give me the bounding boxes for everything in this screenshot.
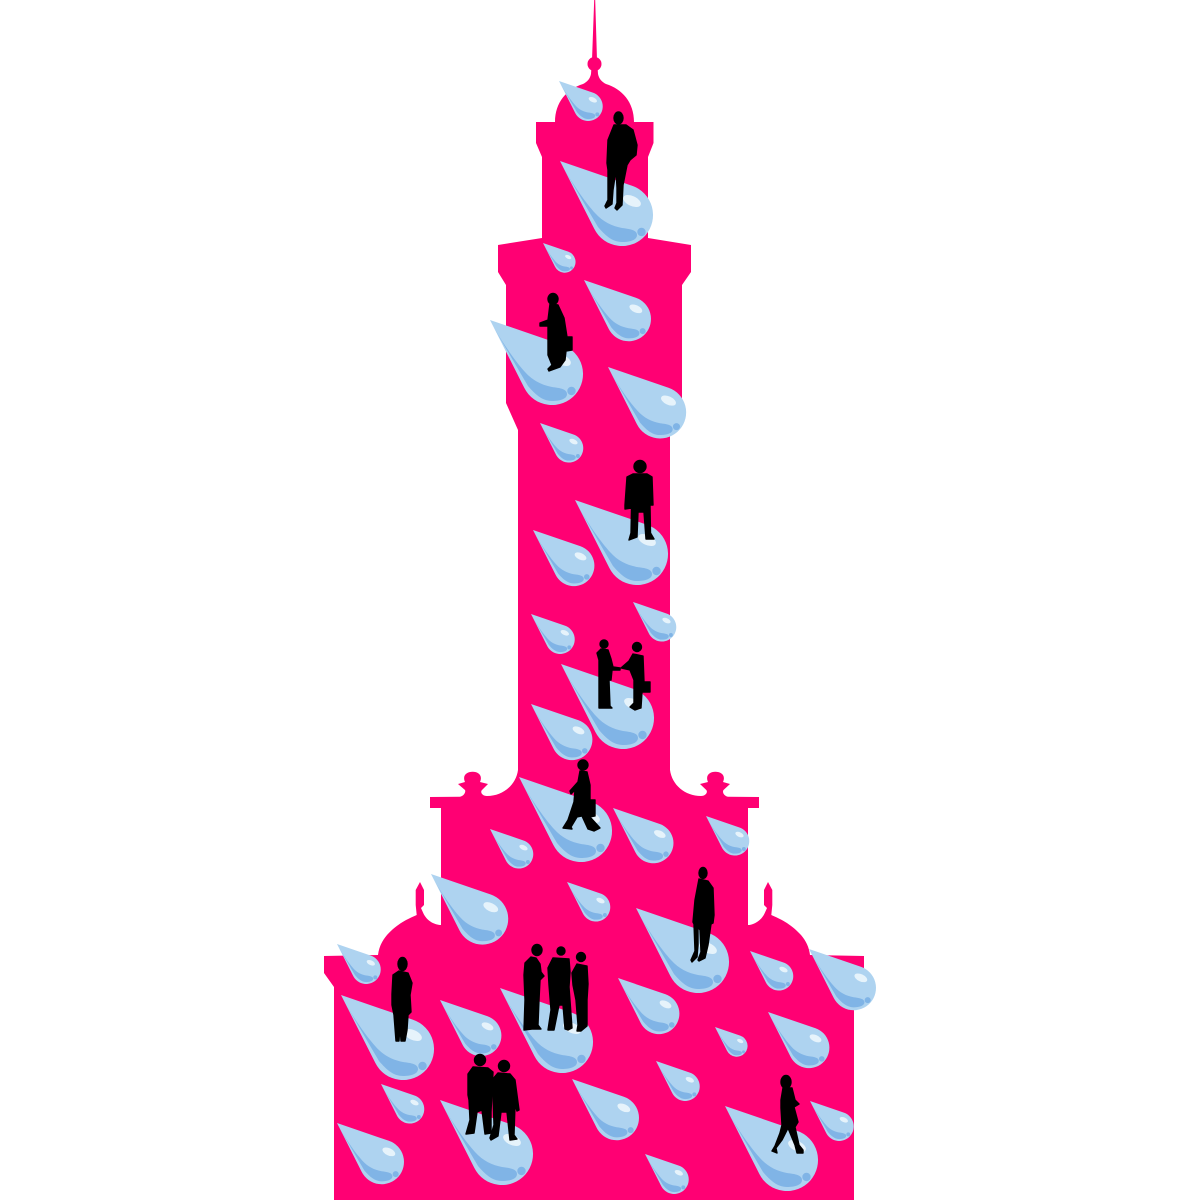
drop 23 [809, 949, 876, 1010]
drop 24 [341, 995, 434, 1080]
drop 29 [768, 1012, 829, 1068]
drop 1 [559, 81, 603, 121]
drop 10 [633, 602, 676, 642]
drop 3 [543, 243, 576, 273]
drop 5 [490, 320, 583, 405]
people silhouettes [392, 112, 803, 1153]
drop 16 [706, 816, 749, 856]
drop 8 [575, 500, 668, 585]
drop 25 [440, 1000, 501, 1056]
drop 20 [636, 908, 729, 993]
water drops [337, 81, 876, 1194]
drop 37 [645, 1154, 689, 1194]
drop 6 [608, 367, 686, 438]
walking woman [772, 1076, 803, 1153]
drop 11 [531, 614, 575, 654]
drop 7 [540, 423, 583, 463]
drop 30 [381, 1084, 424, 1124]
drop 35 [810, 1101, 854, 1141]
left man [466, 1054, 493, 1134]
drop 14 [519, 777, 612, 862]
drop 21 [337, 944, 381, 984]
man standing at top [605, 112, 637, 210]
woman at left [392, 958, 412, 1041]
drop 19 [567, 882, 610, 922]
drop 17 [490, 829, 533, 869]
left person [524, 944, 544, 1030]
drop 31 [656, 1061, 700, 1101]
spire ball [588, 57, 602, 71]
drop 36 [337, 1123, 404, 1184]
drop 22 [750, 951, 793, 991]
drop 2 [560, 161, 653, 246]
drop 13 [531, 704, 592, 760]
walking man with briefcase [563, 760, 600, 831]
drop 32 [572, 1079, 639, 1140]
drop 27 [618, 978, 679, 1034]
tower silhouette [324, 0, 864, 1200]
drop 33 [440, 1100, 533, 1185]
drop 9 [533, 530, 594, 586]
group of three people [524, 944, 588, 1031]
tower body [324, 0, 864, 1200]
right person [572, 952, 588, 1031]
man in suit [625, 460, 654, 540]
middle person [548, 947, 572, 1030]
drop 12 [561, 664, 654, 749]
drop 15 [613, 808, 673, 863]
two men shaking hands [597, 640, 650, 710]
woman in coat [691, 868, 714, 962]
right man [490, 1060, 519, 1140]
drop 4 [584, 280, 651, 341]
drop 34 [725, 1106, 818, 1191]
man with briefcase [540, 294, 572, 371]
drop 18 [431, 874, 508, 945]
drop 26 [500, 988, 593, 1073]
pair of men [466, 1054, 519, 1140]
drop 28 [715, 1027, 748, 1057]
